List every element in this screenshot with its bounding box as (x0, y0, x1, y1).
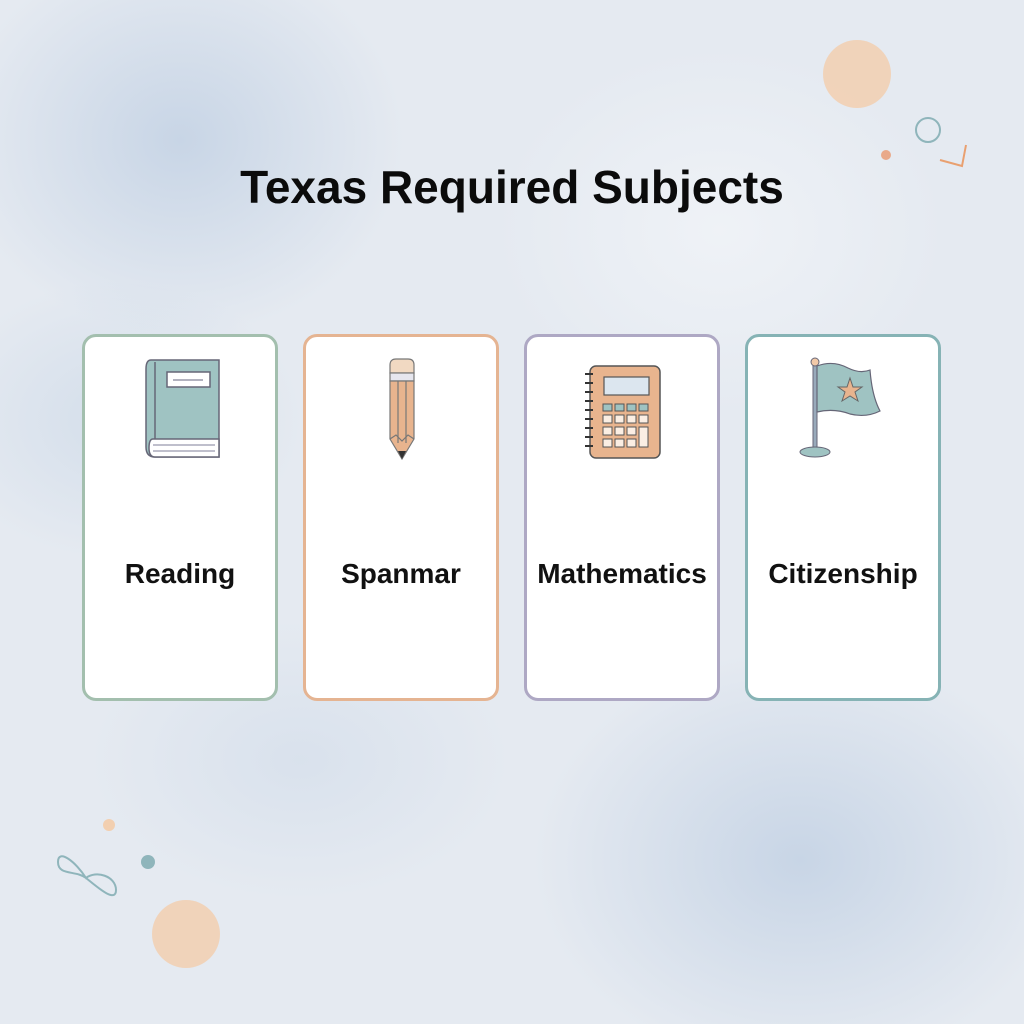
panel: reading: Reading (125, 558, 235, 589)
panel: citizenship (745, 334, 941, 701)
panel: mathematics: Mathematics (537, 558, 707, 589)
icon: flag (800, 358, 881, 458)
icon: calculator (585, 365, 661, 459)
icon: pencil (389, 358, 415, 460)
panel: spanmar: Spanmar (341, 558, 461, 589)
title: Texas Required Subjects (240, 161, 784, 213)
panel: citizenship: Citizenship (768, 558, 918, 589)
panel: spanmar (303, 334, 499, 701)
panel: reading (82, 334, 278, 701)
icon: book (145, 359, 220, 458)
panel: mathematics (524, 334, 720, 701)
